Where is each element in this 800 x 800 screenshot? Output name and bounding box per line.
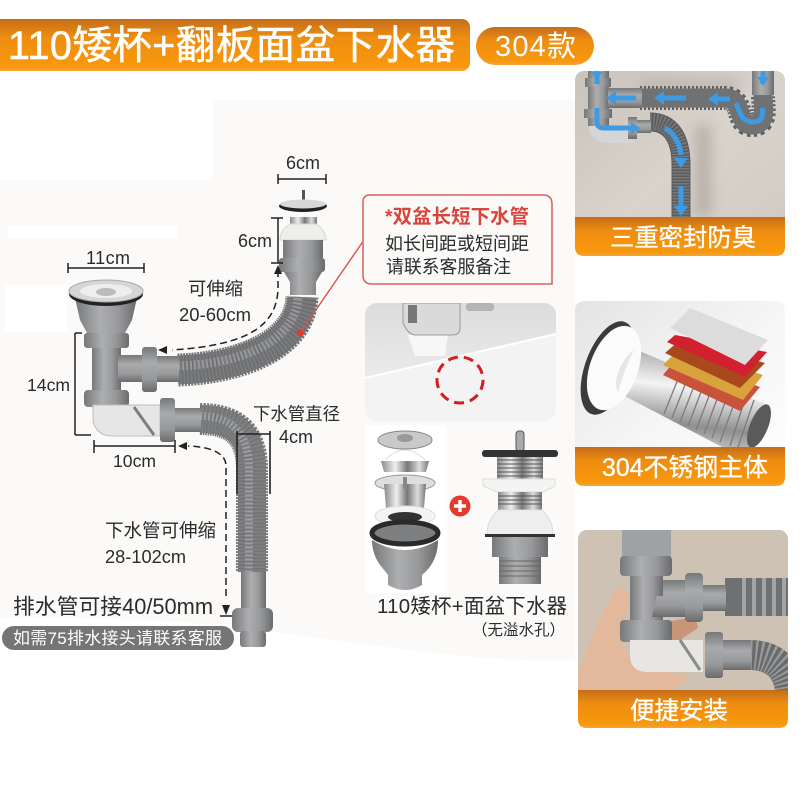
dimension labels: 20-60cm xyxy=(179,304,251,325)
lower corrugated hose xyxy=(200,416,252,572)
icon: plus xyxy=(450,496,470,516)
dimension labels: 6cm xyxy=(286,153,320,173)
panel: three-layer odor seal: 三重密封防臭 xyxy=(610,225,756,252)
sink photo with dashed circle xyxy=(365,303,556,421)
dimension labels: 11cm xyxy=(86,248,130,268)
dimension labels: 10cm xyxy=(113,451,156,471)
parts caption: 110矮杯+面盆下水器 xyxy=(377,595,567,618)
background xyxy=(0,100,575,661)
right strainer (basin waste) xyxy=(279,190,327,295)
product diagram: pipes xyxy=(69,190,327,647)
note pill: 75 drain connector: 如需75排水接头请联系客服 xyxy=(13,629,222,648)
corrugated hoses xyxy=(725,578,789,616)
dimension labels: 可伸缩 xyxy=(188,278,243,299)
blue flow arrows xyxy=(591,71,769,216)
panel: three-layer odor seal xyxy=(575,71,785,256)
dimension labels: 4cm xyxy=(279,427,313,447)
steel tube xyxy=(617,350,768,447)
upper corrugated hose xyxy=(178,297,302,370)
pipes with S trap xyxy=(597,95,764,217)
callout: double basin long/short pipe: 请联系客服备注 xyxy=(386,257,511,277)
callout: double basin long/short pipe: *双盆长短下水管 xyxy=(385,205,529,228)
callout: double basin long/short pipe: 如长间距或短间距 xyxy=(385,234,529,254)
panel: 304 stainless steel body: 304不锈钢主体 xyxy=(602,454,768,482)
exploded strainer parts xyxy=(365,425,447,593)
title banner: 110矮杯+翻板面盆下水器 xyxy=(8,24,455,68)
transparent elbow trap xyxy=(93,398,201,442)
dimension labels: 14cm xyxy=(27,375,70,395)
panel: 304 stainless steel body xyxy=(570,301,785,486)
badge: 304款: 304款 xyxy=(495,30,576,63)
dimension lines and dashed arrows xyxy=(68,174,326,616)
tee and elbow fittings xyxy=(630,596,663,620)
left strainer xyxy=(69,280,143,333)
parts caption xyxy=(377,595,567,639)
dimension labels: 6cm xyxy=(238,231,272,251)
hand xyxy=(578,584,690,695)
drain outlet xyxy=(232,572,273,647)
dimension labels xyxy=(13,153,340,619)
dimension labels: 排水管可接40/50mm xyxy=(13,594,213,619)
callout: double basin long/short pipe xyxy=(296,195,552,336)
material layers xyxy=(663,368,760,411)
panel: easy installation: 便捷安装 xyxy=(630,697,728,725)
dimension labels: 下水管直径 xyxy=(253,404,340,424)
parts caption: （无溢水孔） xyxy=(472,621,565,639)
dimension labels: 下水管可伸缩 xyxy=(105,520,216,541)
basin waste part xyxy=(482,431,558,584)
panel: easy installation xyxy=(578,530,790,728)
left tee fitting xyxy=(84,333,179,407)
badge: 304款 xyxy=(476,27,594,65)
dimension labels: 28-102cm xyxy=(105,547,186,567)
